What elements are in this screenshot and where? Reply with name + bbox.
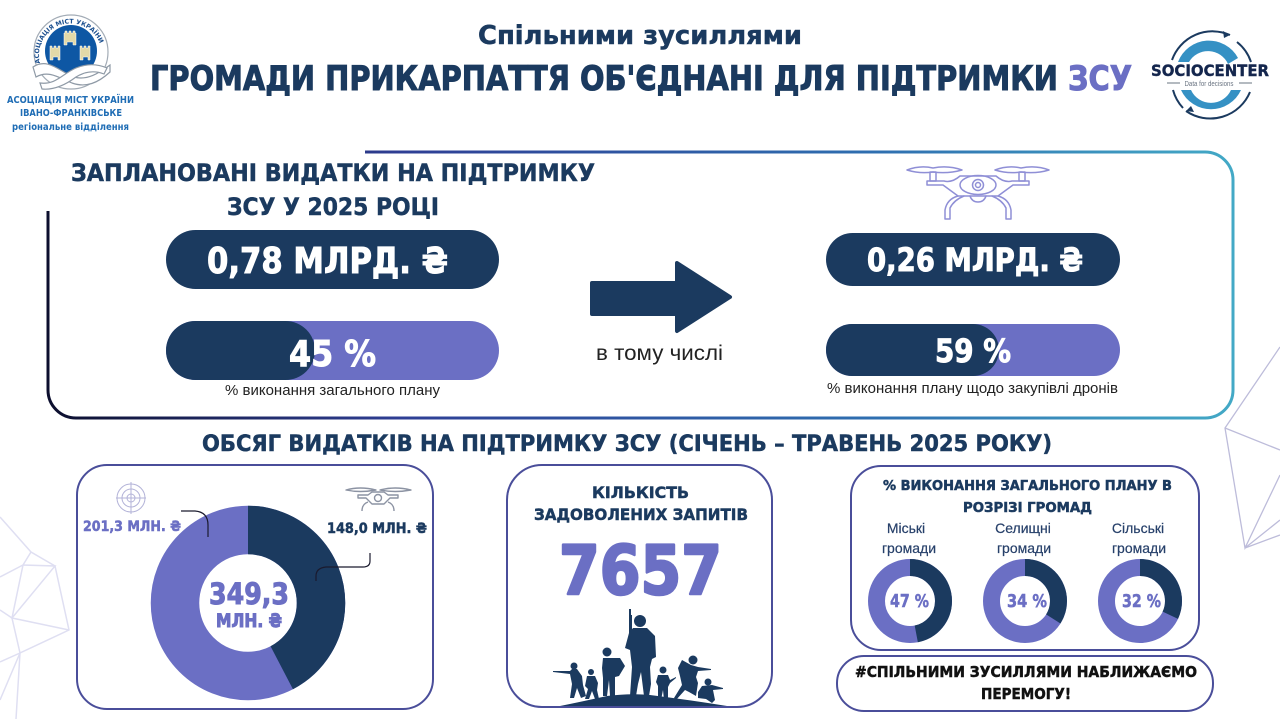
logo: association of Ukrainian cities: ІВАНО-ФРАНКІВСЬКЕ <box>20 108 122 119</box>
value: other spending: 201,3 МЛН. ₴ <box>83 519 181 535</box>
pill: drone planned amount <box>826 233 1120 286</box>
leader line: other spending <box>181 511 208 537</box>
icon: drone <box>907 167 1049 219</box>
panel: spending donut <box>77 465 433 709</box>
panel: plan execution by community <box>851 466 1199 650</box>
community: settlement: Селищні <box>995 520 1051 536</box>
donut chart: spending split <box>175 530 321 676</box>
icon: soldiers silhouette <box>553 609 727 706</box>
community: settlement <box>992 520 1058 634</box>
heading: spending volume: ОБСЯГ ВИДАТКІВ НА ПІДТРИМКУ ЗСУ (СІЧЕНЬ – ТРАВЕНЬ 2025 РОКУ) <box>202 432 1052 457</box>
label: total plan execution: % виконання загального плану <box>225 383 441 399</box>
logo: association of Ukrainian cities <box>7 14 134 133</box>
number: 7657: 7657 <box>559 532 722 611</box>
callout: hashtag: #СПІЛЬНИМИ ЗУСИЛЛЯМИ НАБЛИЖАЄМО <box>855 663 1197 681</box>
panel: satisfied requests <box>507 465 772 707</box>
community: rural: громади <box>1112 540 1166 556</box>
community: urban: 47 % <box>890 591 929 612</box>
heading: satisfied requests: КІЛЬКІСТЬ <box>592 483 689 502</box>
community: urban: громади <box>882 540 936 556</box>
donut total: 349,3 <box>209 577 289 611</box>
subtitle: Спільними зусиллями <box>478 21 802 51</box>
pill: total planned amount: 0,78 МЛРД. ₴ <box>207 241 448 282</box>
progress bar: total plan 45%: 45 % <box>289 334 376 375</box>
heading: plan execution by community: РОЗРІЗІ ГРОМАД <box>963 500 1092 516</box>
arrow <box>592 263 730 331</box>
label: drone plan execution: % виконання плану щодо закупівлі дронів <box>827 381 1118 397</box>
heading: satisfied requests: ЗАДОВОЛЕНИХ ЗАПИТІВ <box>534 505 748 524</box>
logo: Sociocenter: Data for decisions <box>1184 81 1234 88</box>
logo: Sociocenter <box>1151 31 1269 119</box>
heading: planned spending: ЗАПЛАНОВАНІ ВИДАТКИ НА ПІДТРИМКУ <box>71 159 595 187</box>
community: rural <box>1106 520 1174 634</box>
community: rural: Сільські <box>1112 520 1164 536</box>
logo: Sociocenter: SOCIOCENTER <box>1151 61 1269 80</box>
pill: drone planned amount: 0,26 МЛРД. ₴ <box>867 241 1083 279</box>
community: urban <box>876 520 944 634</box>
donut total <box>209 577 289 632</box>
panel: planned spending frame <box>48 152 1233 418</box>
heading: planned spending <box>71 159 595 221</box>
community: rural: 32 % <box>1122 591 1161 612</box>
callout: hashtag: ПЕРЕМОГУ! <box>981 685 1071 703</box>
heading: satisfied requests <box>534 483 748 524</box>
progress bar: total plan 45% <box>166 321 499 380</box>
callout: hashtag <box>837 656 1213 711</box>
pill: total planned amount <box>166 230 499 289</box>
icon: small drone <box>346 488 411 511</box>
value: drones spending: 148,0 МЛН. ₴ <box>327 521 427 537</box>
progress bar: drones 59% <box>826 324 1120 376</box>
heading: plan execution by community <box>883 478 1172 516</box>
logo: association of Ukrainian cities: АСОЦІАЦІЯ МІСТ УКРАЇНИ <box>7 92 134 106</box>
heading: plan execution by community: % ВИКОНАННЯ ЗАГАЛЬНОГО ПЛАНУ В <box>883 478 1172 494</box>
community: urban: Міські <box>887 520 925 536</box>
leader line: drones spending <box>316 553 370 581</box>
icon: target <box>116 482 146 514</box>
logo: association of Ukrainian cities: регіональне відділення <box>12 122 129 133</box>
donut total: МЛН. ₴ <box>216 610 282 632</box>
community: settlement: 34 % <box>1007 591 1047 612</box>
progress bar: drones 59%: 59 % <box>935 332 1011 370</box>
heading: planned spending: ЗСУ У 2025 РОЦІ <box>227 193 439 221</box>
main title: ГРОМАДИ ПРИКАРПАТТЯ ОБ'ЄДНАНІ ДЛЯ ПІДТРИМКИ ЗСУ <box>150 59 1132 99</box>
label: including: в тому числі <box>596 342 723 365</box>
community: settlement: громади <box>997 540 1051 556</box>
logo: association of Ukrainian cities: АСОЦІАЦІЯ МІСТ УКРАЇНИ <box>34 18 104 64</box>
